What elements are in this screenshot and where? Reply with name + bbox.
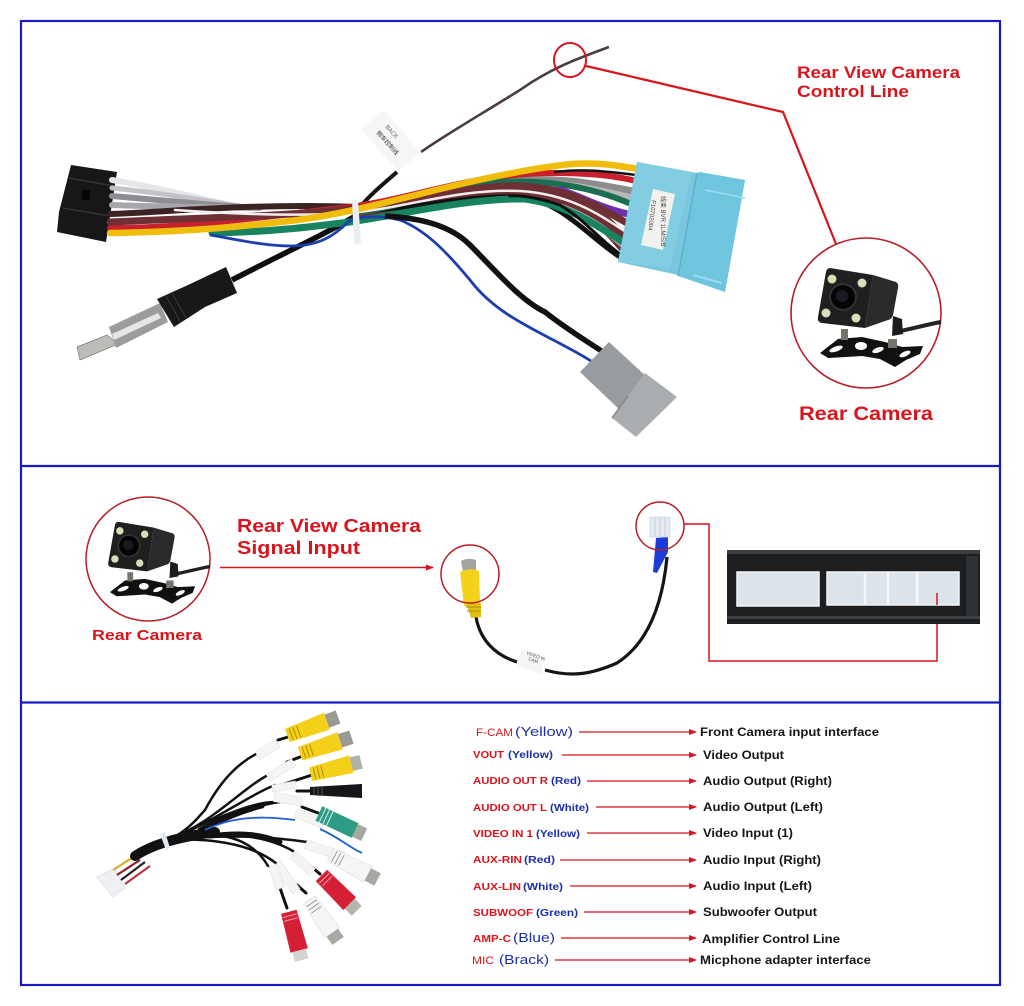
callout: control line circle and leader xyxy=(554,43,836,244)
RCA plug: white xyxy=(327,847,382,888)
RCA yellow plug xyxy=(460,559,481,618)
row: F-CAM: F-CAM xyxy=(476,727,513,739)
row: MIC: Micphone adapter interface xyxy=(700,955,871,967)
panel: rear camera signal input xyxy=(86,497,980,674)
row: SUBWOOF: (Green) xyxy=(536,907,578,919)
blue connector xyxy=(618,162,745,292)
RCA cable xyxy=(476,557,667,674)
row: F-CAM: (Yellow) xyxy=(515,725,573,739)
RCA plug: yellow 3 xyxy=(308,753,363,783)
row: VIDEO IN 1 xyxy=(473,828,793,840)
row: MIC: MIC xyxy=(472,955,494,967)
label: small rear camera: Rear Camera xyxy=(92,627,203,644)
row: AUDIO OUT R: Audio Output (Right) xyxy=(703,776,832,788)
heading: rear view camera control line: Control Line xyxy=(797,82,909,101)
row: AUX-RIN: AUX-RIN xyxy=(473,854,522,866)
RCA plug: red 1 xyxy=(315,869,363,917)
row: SUBWOOF xyxy=(473,907,817,919)
control wire xyxy=(360,47,609,207)
head unit socket panel xyxy=(727,550,980,624)
heading: signal input: Rear View Camera xyxy=(237,516,422,536)
white connector with blue sleeve xyxy=(650,517,670,573)
label: rear camera: Rear Camera xyxy=(799,404,933,425)
legend: connector functions xyxy=(472,725,879,967)
row: F-CAM xyxy=(476,725,879,739)
cable label xyxy=(517,648,546,674)
jack: black mic xyxy=(310,784,362,798)
row: VIDEO IN 1: VIDEO IN 1 xyxy=(473,828,533,840)
row: MIC: (Brack) xyxy=(499,953,549,967)
RCA plug: yellow 2 xyxy=(297,729,354,762)
row: VIDEO IN 1: (Yellow) xyxy=(536,828,580,840)
black connector xyxy=(57,165,117,242)
heading: rear view camera control line xyxy=(797,63,961,101)
row: AUDIO OUT L: (White) xyxy=(550,802,589,814)
panel: RCA breakout cable xyxy=(97,709,382,962)
row: AMP-C xyxy=(473,931,840,946)
heading: rear view camera control line: Rear View Camera xyxy=(797,63,961,82)
row: AUX-RIN xyxy=(473,854,821,867)
row: MIC xyxy=(472,953,871,967)
multicolour wires at connector xyxy=(113,856,150,884)
white heat-shrink labels xyxy=(255,740,345,894)
wire label: 倒车控制线 xyxy=(375,129,401,157)
row: AMP-C: (Blue) xyxy=(513,931,555,945)
row: AUDIO OUT R xyxy=(473,775,832,788)
cable tie xyxy=(160,832,170,850)
row: AUDIO OUT R: AUDIO OUT R xyxy=(473,775,548,787)
wire label xyxy=(361,110,421,171)
row: VOUT xyxy=(473,749,784,762)
socket: left xyxy=(737,572,819,606)
grey connector xyxy=(580,342,677,437)
RCA plug: yellow 1 xyxy=(284,709,341,744)
callout circle: RCA plug xyxy=(441,545,499,603)
RCA plug: green xyxy=(315,806,368,842)
wire label: BACK xyxy=(384,124,399,140)
row: AUDIO OUT L: Audio Output (Left) xyxy=(703,802,823,814)
row: VOUT: Video Output xyxy=(703,750,784,762)
row: AUDIO OUT R: (Red) xyxy=(551,775,581,787)
antenna wire xyxy=(232,212,362,280)
icon: rear camera in circle xyxy=(791,238,941,388)
wire bundle xyxy=(110,163,638,257)
connector sticker xyxy=(641,189,675,250)
row: AMP-C: AMP-C xyxy=(473,933,511,945)
row: AMP-C: Amplifier Control Line xyxy=(702,934,840,946)
icon: small rear camera in circle xyxy=(86,497,210,621)
arrow: camera to RCA xyxy=(220,566,433,568)
row: VOUT: VOUT xyxy=(473,749,505,761)
row: AUX-RIN: Audio Input (Right) xyxy=(703,855,821,867)
leader line to socket xyxy=(684,524,937,661)
row: AUX-RIN: (Red) xyxy=(524,854,555,866)
RCA plug: red 2 xyxy=(280,909,310,962)
heading: signal input xyxy=(237,516,422,558)
row: SUBWOOF: Subwoofer Output xyxy=(703,907,817,919)
black cable fan xyxy=(135,737,320,908)
cable label: VIDEO IN xyxy=(526,650,546,662)
blue wire xyxy=(210,217,591,361)
RCA plug: white 2 xyxy=(302,895,345,946)
row: VIDEO IN 1: Video Input (1) xyxy=(703,828,793,840)
callout circle: connector xyxy=(636,502,684,550)
row: AUX-LIN: AUX-LIN xyxy=(473,881,521,893)
heading: signal input: Signal Input xyxy=(237,538,360,558)
row: AUDIO OUT L: AUDIO OUT L xyxy=(473,802,548,814)
row: F-CAM: Front Camera input interface xyxy=(700,727,879,739)
row: AUX-LIN xyxy=(473,881,812,893)
antenna plug xyxy=(77,267,237,360)
cable label: CAM xyxy=(528,656,539,664)
connector sticker: 线束 BVR 1LM/S/B xyxy=(659,196,667,247)
cable tie xyxy=(352,199,361,244)
white multi-pin connector xyxy=(97,868,125,897)
row: AUDIO OUT L xyxy=(473,802,823,814)
blue control wire xyxy=(205,818,362,853)
row: AUX-LIN: (White) xyxy=(523,881,563,893)
row: VOUT: (Yellow) xyxy=(508,749,553,761)
row: AUX-LIN: Audio Input (Left) xyxy=(703,881,812,893)
connector sticker: F10702004 xyxy=(646,200,656,231)
panel: main wiring harness xyxy=(57,47,745,437)
socket: right xyxy=(827,572,959,605)
black power wire xyxy=(385,216,603,352)
row: SUBWOOF: SUBWOOF xyxy=(473,907,534,919)
